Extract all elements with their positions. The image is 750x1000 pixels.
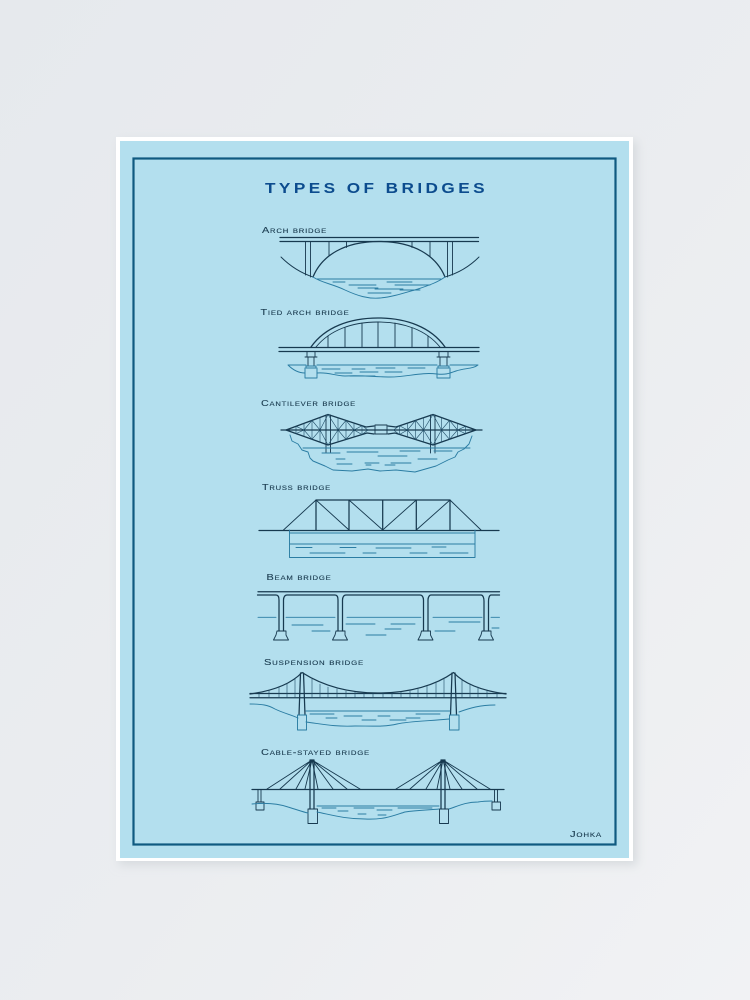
label: truss bridge: Truss bridge (262, 482, 331, 492)
label: tied arch bridge: Tied arch bridge (260, 307, 350, 317)
diagram: truss bridge (259, 500, 499, 558)
diagram: suspension bridge (250, 672, 506, 730)
diagram: arch bridge (280, 238, 479, 298)
diagram: tied arch bridge (279, 318, 479, 378)
label: suspension bridge: Suspension bridge (264, 657, 364, 667)
label: cable-stayed bridge: Cable-stayed bridge (261, 747, 370, 757)
frame border (134, 158, 616, 844)
diagram: beam bridge (258, 592, 500, 640)
poster (116, 137, 637, 865)
diagram: cantilever bridge (281, 414, 482, 472)
diagram: cable-stayed bridge (252, 760, 504, 824)
label: cantilever bridge: Cantilever bridge (261, 398, 356, 408)
signature: Johka (570, 829, 602, 839)
label: arch bridge: Arch bridge (262, 225, 327, 235)
label: beam bridge: Beam bridge (266, 572, 332, 582)
title: TYPES OF BRIDGES (265, 180, 488, 197)
